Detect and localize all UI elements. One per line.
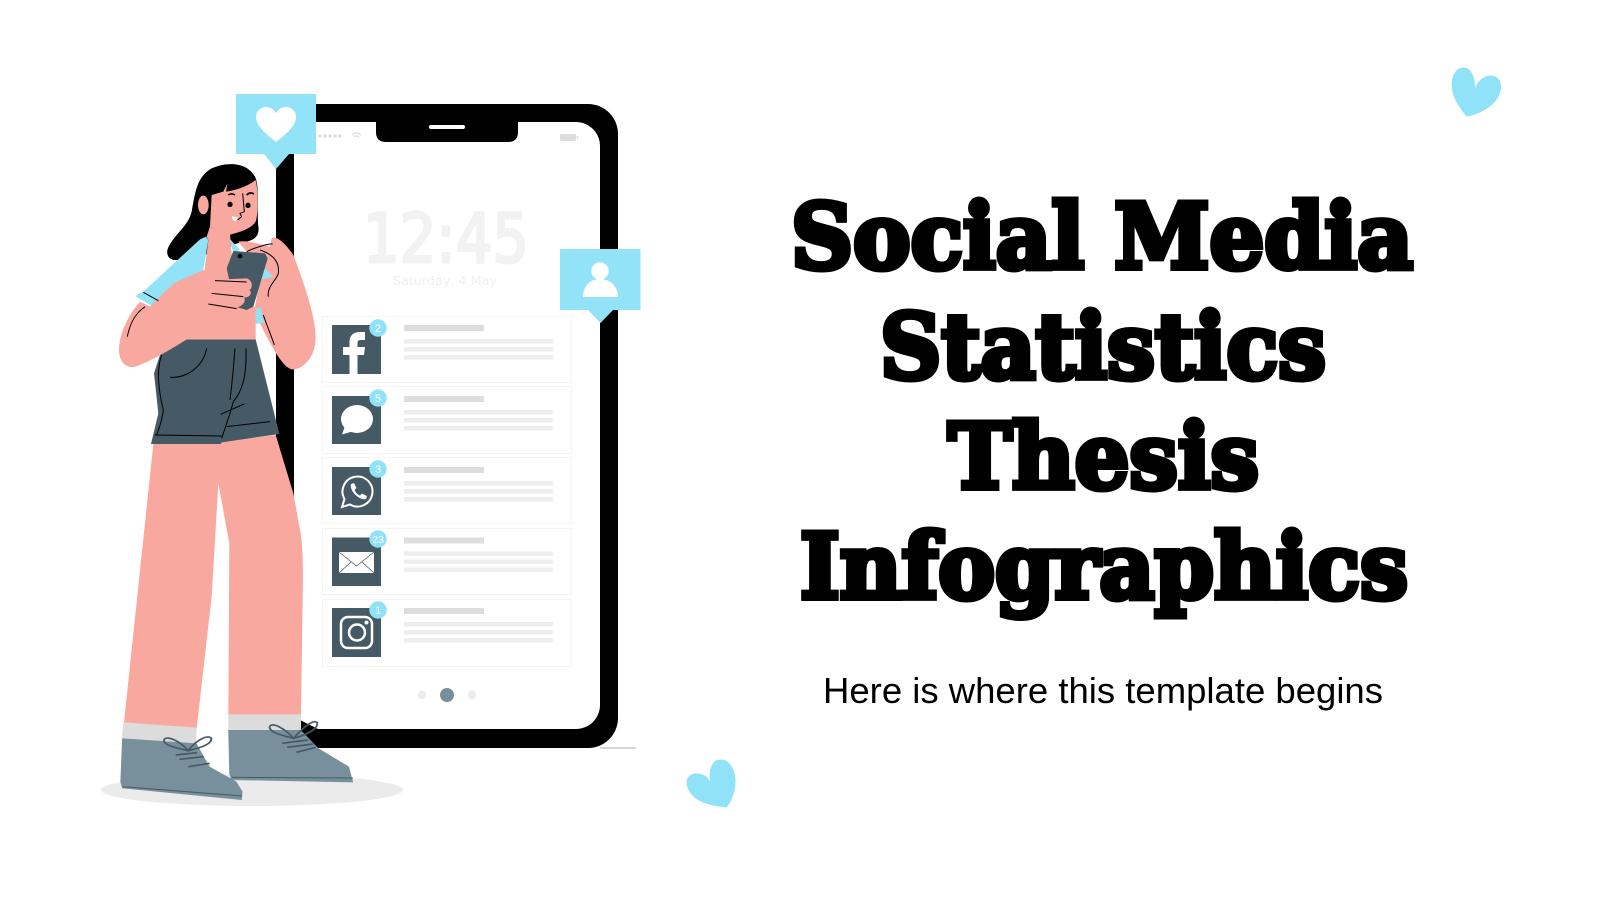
title: Infographics: [800, 514, 1408, 620]
notification: instagram: [322, 600, 572, 666]
callout: heart: [236, 94, 316, 169]
notification: whatsapp: 3: [375, 464, 381, 476]
subtitle: Here is where this template begins: [823, 670, 1383, 711]
icon: heart bottom centre: [687, 759, 736, 807]
title: Thesis: [948, 404, 1259, 510]
ear: [198, 196, 209, 214]
fingers: [203, 278, 252, 307]
line work: [127, 244, 279, 438]
title: [791, 184, 1413, 620]
lock screen clock: 12:45: [363, 200, 529, 279]
hair: [167, 164, 259, 260]
notification: messages: [322, 386, 572, 454]
upper body: [119, 164, 316, 444]
notification: mail: 23: [372, 534, 384, 546]
lock screen date: Saturday, 4 May: [393, 273, 498, 288]
phone in hand: [227, 251, 268, 310]
torso and left arm: [119, 270, 256, 367]
icon: heart top right: [1452, 67, 1501, 117]
notification: messages: 5: [375, 393, 381, 405]
face details: [227, 193, 254, 221]
title: Social Media: [791, 184, 1413, 290]
notification list: [322, 316, 572, 666]
face: [210, 180, 258, 235]
phone illustration: [276, 104, 636, 748]
neck: [203, 227, 237, 280]
ground shadow: [101, 774, 403, 806]
shoes: [120, 722, 353, 800]
right arm: [238, 238, 316, 369]
title: Statistics: [880, 294, 1326, 400]
notification: facebook: [322, 316, 572, 382]
notification: mail: [322, 528, 572, 594]
callout: person: [560, 249, 640, 323]
pagination dots: [418, 688, 476, 702]
trousers: [122, 435, 303, 744]
notification: instagram: 1: [375, 605, 381, 617]
shorts: [151, 339, 279, 444]
notification: facebook: 2: [375, 323, 381, 335]
woman illustration: [119, 164, 353, 800]
notification: whatsapp: [322, 458, 572, 524]
status bar: [318, 133, 578, 141]
sleeve: [135, 237, 208, 307]
phone body: [276, 104, 636, 748]
